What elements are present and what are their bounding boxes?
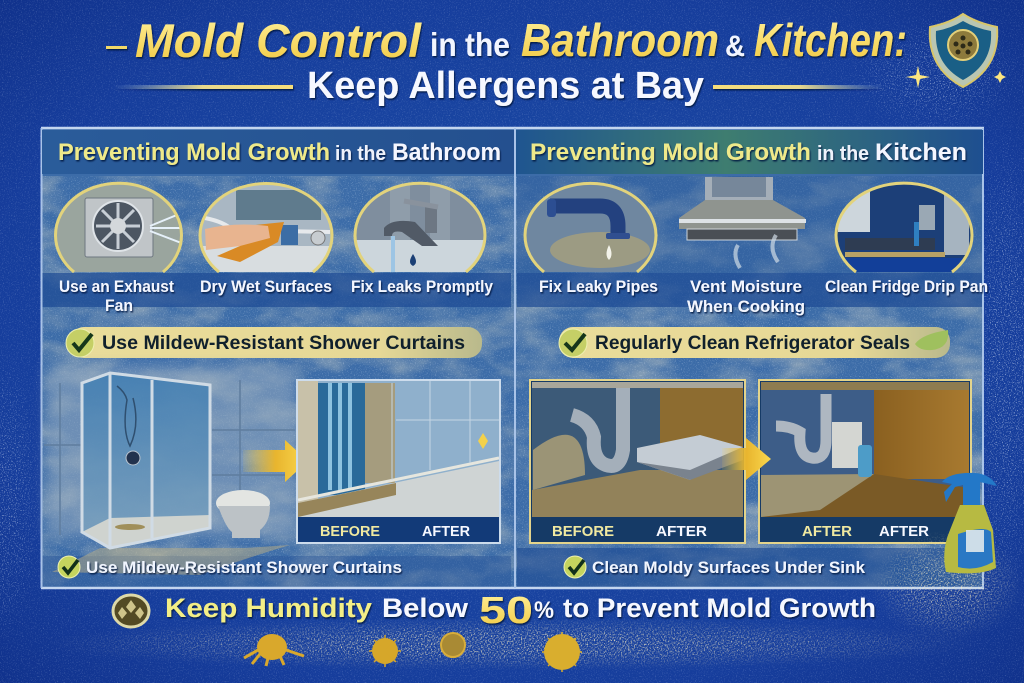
text: kitchen tip labels: Fix Leaky Pipes — [539, 278, 658, 296]
text: kitchen tip labels: When Cooking — [687, 298, 805, 316]
icon: mold spore one — [369, 635, 401, 667]
panel: content frame — [41, 128, 984, 588]
callout: keep humidity below 50%: Keep Humidity — [165, 593, 372, 623]
panel: bathroom heading — [42, 130, 514, 174]
icon: humidity medallion — [113, 595, 149, 627]
subtitle: Keep Allergens at Bay — [307, 65, 704, 107]
text: under sink tip: Clean Moldy Surfaces Under Sink — [592, 558, 866, 577]
icon: mold spore two — [441, 633, 465, 657]
panel: bathroom before and after: AFTER — [422, 524, 471, 540]
panel: kitchen heading: Preventing Mold Growth — [530, 139, 811, 166]
text: kitchen tip labels: Vent Moisture — [690, 278, 802, 296]
panel: bathroom heading: Bathroom — [392, 139, 501, 166]
callout: mildew-resistant curtains pill: Use Mildew-Resistant Shower Curtains — [102, 333, 465, 354]
text: bathroom tip labels: Fan — [105, 297, 133, 315]
panel: bathroom before and after: BEFORE — [320, 524, 380, 540]
icon: leaky pipe — [520, 180, 660, 275]
panel: kitchen heading — [516, 130, 983, 174]
subtitle — [113, 65, 885, 107]
callout: keep humidity below 50%: Below — [382, 593, 469, 623]
arrow: kitchen before to after — [722, 438, 771, 480]
panel: kitchen before: AFTER — [656, 524, 708, 540]
illustration: tiled wall, shower and toilet — [44, 366, 296, 575]
panel: kitchen after — [759, 380, 971, 543]
arrow: bathroom before to after — [243, 440, 308, 482]
title: in the — [430, 26, 510, 63]
text: bathroom tip labels: Use an Exhaust — [59, 278, 174, 296]
panel: bathroom heading: Preventing Mold Growth — [58, 139, 330, 166]
icon: spray bottle — [942, 473, 997, 573]
title — [106, 14, 907, 67]
panel: kitchen before: BEFORE — [552, 524, 614, 540]
panel: gold dust — [40, 530, 1024, 670]
icon: mold spore three — [542, 632, 582, 672]
icon: shield badge — [906, 14, 1006, 88]
icon: hand drying surface — [195, 180, 335, 275]
icon: exhaust fan — [54, 182, 183, 274]
title: Mold Control — [135, 14, 422, 67]
title: Kitchen: — [754, 14, 907, 66]
text: kitchen tip labels: Clean Fridge Drip Pan — [825, 278, 988, 296]
callout: refrigerator seals pill: Regularly Clean Refrigerator Seals — [595, 333, 910, 354]
title: & — [725, 30, 745, 63]
text: bathroom tip labels — [59, 278, 494, 315]
title: Bathroom — [521, 14, 719, 66]
callout: refrigerator seals pill — [559, 327, 950, 358]
icon: range hood — [679, 177, 806, 268]
callout: keep humidity below 50%: % — [534, 597, 554, 624]
callout: keep humidity below 50% — [165, 590, 876, 632]
text: shower tip: Use Mildew-Resistant Shower Curtains — [86, 558, 402, 577]
text: bathroom tip labels: Dry Wet Surfaces — [200, 278, 332, 296]
panel: kitchen after: AFTER — [802, 524, 853, 540]
panel: kitchen before — [530, 380, 745, 543]
panel: kitchen after: AFTER — [879, 524, 930, 540]
callout: keep humidity below 50%: 50 — [479, 590, 533, 632]
callout: mildew-resistant curtains pill — [66, 327, 482, 358]
panel: bathroom before and after — [297, 380, 500, 543]
text: bathroom tip labels: Fix Leaks Promptly — [351, 278, 494, 296]
callout: keep humidity below 50%: to Prevent Mold Growth — [563, 593, 876, 623]
icon: fridge and stove — [830, 180, 975, 275]
panel: kitchen heading: in the — [817, 143, 869, 165]
icon: dust mite — [244, 634, 304, 666]
panel: bathroom heading: in the — [335, 143, 386, 165]
text: kitchen tip labels — [539, 278, 988, 316]
panel: kitchen heading: Kitchen — [875, 139, 967, 166]
icon: dripping faucet — [350, 180, 490, 275]
